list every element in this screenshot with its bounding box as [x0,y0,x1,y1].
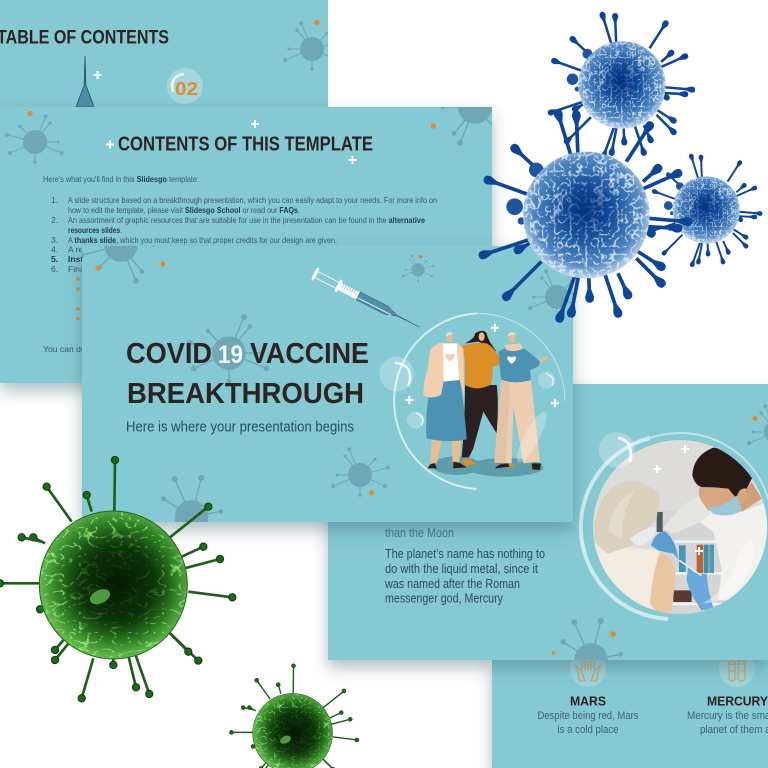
bubble ring [394,313,565,489]
person: middle [462,331,501,466]
ground shadow [433,456,543,477]
text block: template contents list: A thanks slide, which you must keep so that proper credits for our design are given. [68,235,337,245]
icon: hands in bubble [570,651,606,687]
text block: planet name [384,547,545,606]
person: left [423,332,467,468]
title line 1: 19 [218,341,243,369]
orange dots [27,111,436,320]
text block: planet name: was named after the Roman [384,577,520,591]
text: mars description: is a cold place [558,724,618,736]
text block: planet name: messenger god, Mercury [385,592,504,606]
orange dot [314,20,320,25]
icon: virus left [5,115,63,163]
bubble ring and sparkles [379,313,565,489]
virus: small green [231,666,357,768]
title line 1 [127,342,368,364]
icon: virus lower middle [332,448,390,496]
icon: virus right [528,269,573,318]
icon: virus bottom left [160,474,224,522]
text block: template contents list: A resources page [68,244,135,254]
ring around photo [581,433,768,619]
virus: top [551,15,692,156]
icon: syringe [312,267,420,328]
text block: template contents list: 1. [51,195,58,205]
icon: test tubes in bubble [719,651,755,687]
orange dot [752,416,758,421]
text block: template contents list: 2. [51,215,58,225]
text block: template contents list: how to edit the template, please visit Slidesgo School or read our FAQs. [68,205,300,215]
text block: template contents list: Here's what you'll find in this Slidesgo template: [43,174,199,184]
text block: template contents list: 4. [51,244,58,254]
orange dot [369,490,374,496]
heading: table of contents: TABLE OF CONTENTS [0,28,169,48]
text block: template contents list: You can delete this slide [43,344,136,354]
text: mars description [538,710,639,736]
text: mercury description [687,710,768,736]
text: mars description: Despite being red, Mars [538,710,639,722]
plus signs [106,120,356,164]
translucent leaf [512,409,551,466]
person: right [494,332,548,470]
text block: template contents list [43,174,437,354]
text block: template contents list: An assortment of graphic resources that are suitable for use in the presentation can be found in the alternative [68,215,425,225]
photo: doctor vaccinating a patient [593,440,767,614]
text block: planet name: do with the liquid metal, since it [385,562,538,576]
orange dots [95,261,166,271]
text block: template contents list: Instructions [68,254,117,264]
icon: virus right edge [747,404,768,445]
number badge 02: 02 [175,79,198,99]
decorative bubbles [379,357,555,429]
icon: plus [94,71,102,79]
icon: virus top left [82,246,155,284]
text block: template contents list: resources slides. [68,225,122,235]
title line 2: BREAKTHROUGH [127,378,364,410]
slide: title covid-19 vaccine breakthrough [80,215,587,534]
icon: virus top right [283,21,328,71]
text block: template contents list: 6. [51,264,58,274]
heading: mars: MARS [570,694,606,708]
virus: large [483,113,688,318]
icon: virus behind 19 [188,315,269,383]
title line 1: COVID [126,338,212,370]
orange dot [419,255,422,258]
slide: table of contents [0,0,342,107]
text block: template contents list: 3. [51,235,58,245]
slide: mars and mercury [492,651,768,768]
icon: small virus [402,255,434,282]
text block: template contents list: 5. [51,254,58,264]
slide: vaccination photo and mercury text [328,384,768,677]
blue coronavirus cluster [483,15,760,318]
virus: right [652,156,760,265]
virus: large green [0,460,232,698]
text block: moon line: than the Moon [385,526,454,540]
title line 1: VACCINE [250,338,369,370]
illustration: three people [423,331,551,477]
icon: syringe needle [76,56,94,107]
text block: template contents list: Final pages [68,264,112,274]
heading: contents of this template: CONTENTS OF THIS TEMPLATE [118,134,373,156]
icon: virus top right [440,107,492,146]
number badge 02 [167,68,203,104]
green virus cluster [0,460,357,768]
decorative bubble [599,432,635,468]
orange dots [552,631,616,655]
plus signs [653,445,703,555]
subtitle: Here is where your presentation begins [126,420,354,436]
text block: planet name: The planet’s name has nothing to [385,547,545,561]
text block: template contents list: A slide structure based on a breakthrough presentation, which you can easily adapt to your needs. For more info on [68,195,437,205]
slide: contents of this template [0,77,516,383]
icon: virus bottom [560,618,623,660]
plus signs [405,324,559,407]
